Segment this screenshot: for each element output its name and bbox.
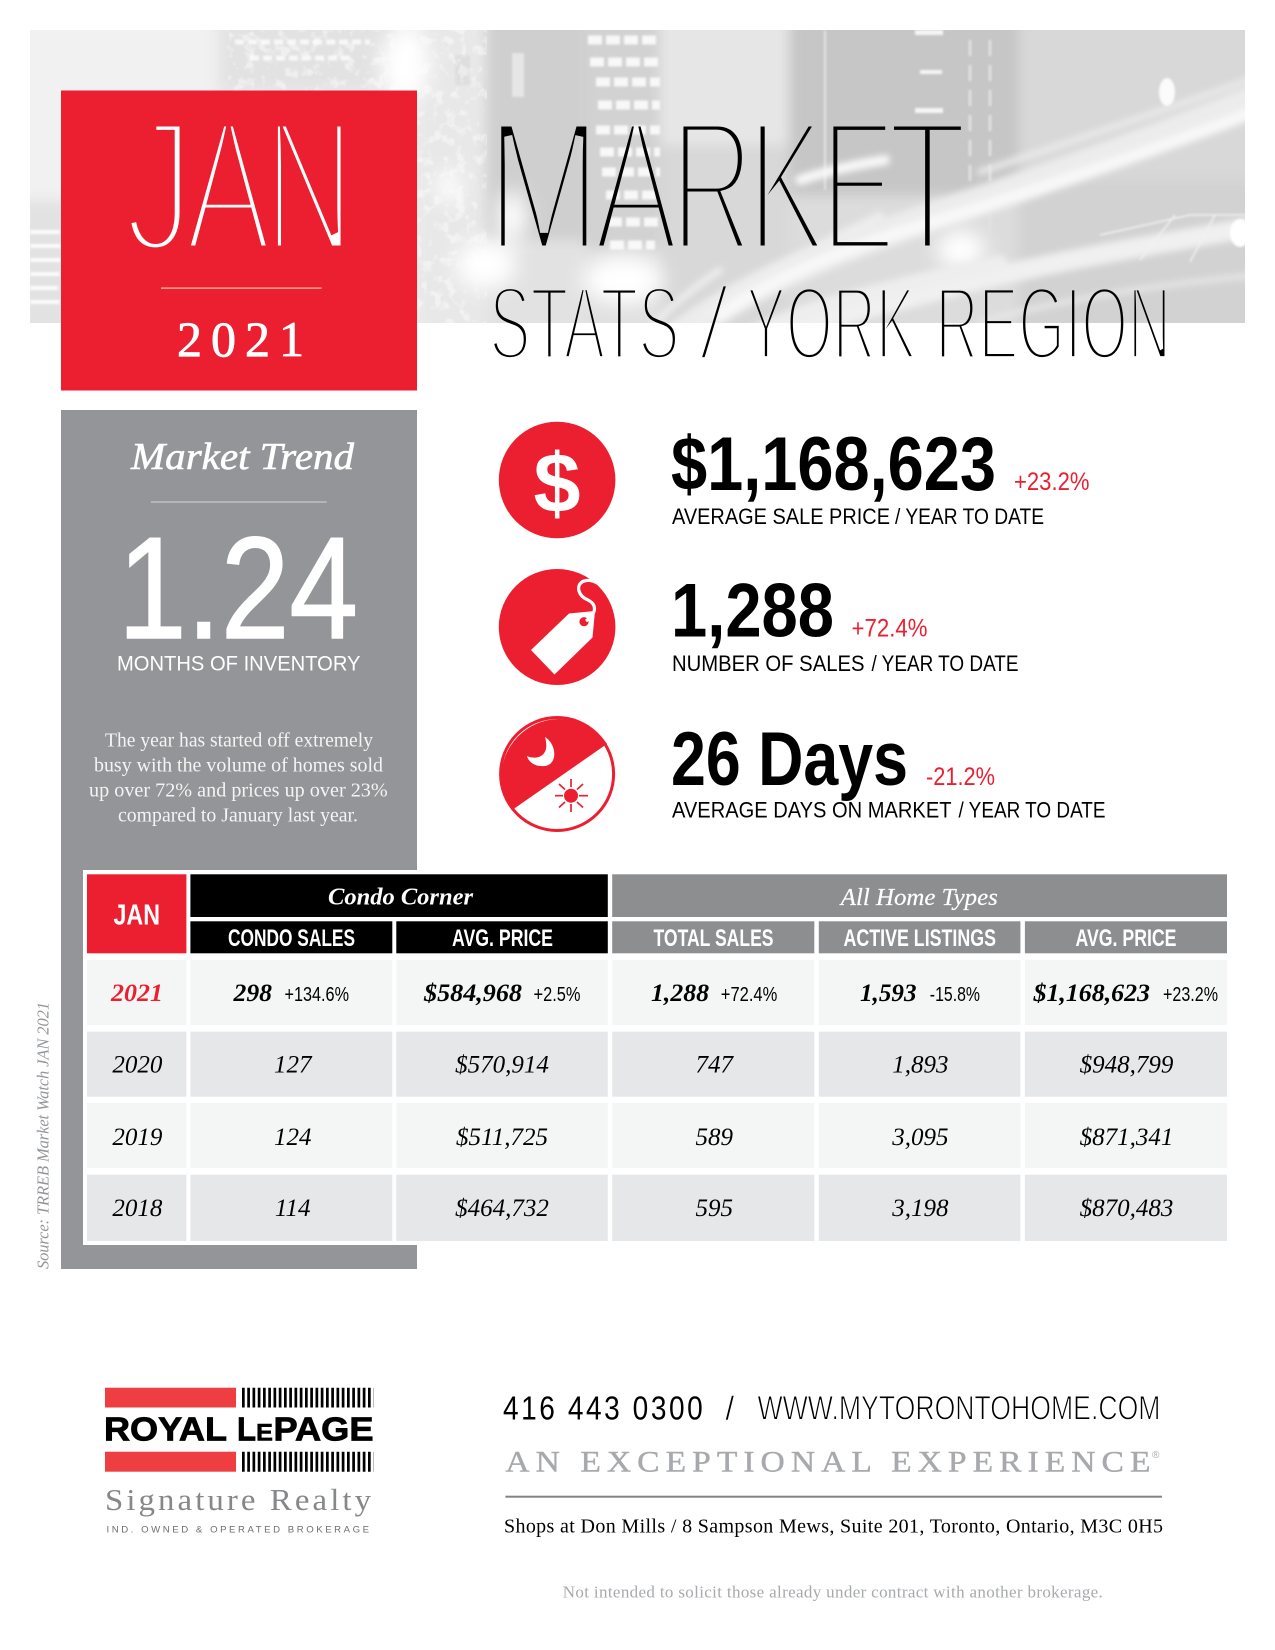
- stat: average sale price: $1,168,623: [671, 422, 996, 507]
- row 2019: $871,341: [1080, 1124, 1173, 1151]
- title: MARKET: E: [821, 81, 896, 292]
- row 2021: +134.6%: [284, 984, 349, 1006]
- paragraph: market summary: busy with the volume of homes sold: [94, 755, 383, 777]
- tagline: AN EXCEPTIONAL EXPERIENCE: [505, 1445, 1151, 1478]
- header group: Condo Corner: Condo Corner: [328, 884, 474, 910]
- contact line: phone and website: 416 443 0300: [503, 1390, 703, 1427]
- stat: average sale price: AVERAGE SALE PRICE: [672, 504, 890, 529]
- row 2020: $570,914: [455, 1052, 549, 1079]
- subtitle: STATS / YORK REGION: [494, 286, 1164, 358]
- header group: All Home Types: [612, 874, 1227, 917]
- title: MARKET: T: [887, 81, 968, 292]
- subtitle: STATS / YORK REGION: /: [698, 266, 730, 382]
- disclaimer: Not intended to solicit those already under contract with another brokerage.: [563, 1583, 1103, 1602]
- row 2020: 2020: [112, 1052, 163, 1079]
- row 2018: 2018: [112, 1195, 163, 1222]
- row 2021: +23.2%: [1163, 984, 1218, 1006]
- stat: number of sales: [671, 569, 1018, 676]
- column headers: AVG. PRICE: [452, 925, 553, 952]
- logo: Royal LePage Signature Realty: PAGE: [274, 1412, 374, 1449]
- logo: Royal LePage Signature Realty: IND. OWNED & OPERATED BROKERAGE: [106, 1525, 369, 1536]
- header group: Condo Corner: [190, 874, 608, 917]
- contact line: phone and website: WWW.MYTORONTOHOME.COM: [758, 1390, 1160, 1428]
- table corner: JAN: JAN: [114, 899, 160, 931]
- stat: average sale price: +23.2%: [1014, 468, 1090, 496]
- row 2021: 298: [232, 980, 273, 1007]
- stat: average days on market: AVERAGE DAYS ON MARKET: [672, 798, 952, 823]
- paragraph: market summary: The year has started off extremely: [105, 730, 373, 752]
- panel: market trend: [61, 410, 417, 1269]
- header group: All Home Types: All Home Types: [839, 885, 998, 911]
- column headers: [190, 921, 1227, 953]
- month heading JAN: N: [264, 81, 354, 292]
- stat: average days on market: / YEAR TO DATE: [958, 798, 1106, 823]
- stat: number of sales: +72.4%: [852, 615, 928, 643]
- row 2021: 1,288: [651, 980, 710, 1007]
- row 2020: 1,893: [892, 1052, 949, 1079]
- contact line: phone and website: /: [726, 1389, 735, 1426]
- column headers: CONDO SALES: [228, 925, 355, 952]
- column headers: TOTAL SALES: [654, 925, 774, 952]
- row 2021: -15.8%: [930, 984, 980, 1006]
- title: MARKET: A: [594, 81, 678, 292]
- stat label: months of inventory: MONTHS OF INVENTORY: [117, 652, 360, 676]
- tree texture: [225, 30, 487, 323]
- logo: Royal LePage Signature Realty: L: [237, 1412, 256, 1449]
- icon: dollar sign: $: [534, 436, 580, 530]
- row 2020: 127: [274, 1052, 313, 1079]
- row 2018: 3,198: [891, 1195, 949, 1222]
- tagline: ®: [1152, 1450, 1160, 1461]
- paragraph: market summary: compared to January last year.: [118, 805, 358, 827]
- background photo: city night street: [30, 30, 1245, 323]
- icon: dollar sign: [499, 422, 615, 538]
- row 2018: 114: [275, 1195, 311, 1222]
- stat: number of sales: 1,288: [671, 569, 834, 654]
- table: market statistics: [83, 870, 1231, 1245]
- row 2021: [87, 960, 1227, 1025]
- row 2018: $870,483: [1080, 1195, 1173, 1222]
- stat: number of sales: NUMBER OF SALES: [672, 651, 864, 676]
- row 2020: $948,799: [1080, 1052, 1174, 1079]
- row 2021: $1,168,623: [1032, 980, 1150, 1007]
- row 2019: $511,725: [456, 1124, 548, 1151]
- title: MARKET: [501, 126, 961, 246]
- heading: Market Trend: Market Trend: [130, 436, 355, 478]
- icon: price tag: [499, 569, 615, 685]
- row 2019: 124: [274, 1124, 311, 1151]
- icon: day and night: [501, 718, 614, 830]
- row 2021: +2.5%: [534, 984, 581, 1006]
- stat: 1.24: 1.24: [118, 507, 358, 669]
- logo: Royal LePage Signature Realty: ROYAL: [104, 1412, 227, 1449]
- address: Shops at Don Mills / 8 Sampson Mews, Suite 201, Toronto, Ontario, M3C 0H5: [504, 1516, 1163, 1538]
- source note: Source: TRREB Market Watch JAN 2021: [34, 1002, 52, 1269]
- title: MARKET: M: [486, 81, 602, 292]
- row 2019: 589: [696, 1124, 734, 1151]
- column headers: ACTIVE LISTINGS: [844, 925, 996, 952]
- panel: red month box: [61, 81, 417, 390]
- row 2020: 747: [696, 1052, 735, 1079]
- paragraph: market summary: [89, 730, 388, 827]
- row 2018: 595: [696, 1195, 733, 1222]
- year 2021: 2021: [177, 311, 304, 367]
- logo: Royal LePage Signature Realty: Signature Realty: [105, 1483, 371, 1517]
- month heading JAN: J: [124, 81, 194, 292]
- stat: average sale price: / YEAR TO DATE: [895, 504, 1044, 529]
- row 2020: [87, 1032, 1227, 1097]
- stat: number of sales: / YEAR TO DATE: [872, 651, 1018, 676]
- row 2021: 2021: [110, 980, 163, 1007]
- title: MARKET: K: [748, 81, 826, 292]
- column headers: AVG. PRICE: [1076, 925, 1176, 952]
- row 2019: [87, 1103, 1227, 1168]
- table corner: JAN: [87, 874, 186, 953]
- logo: Royal LePage Signature Realty: [104, 1388, 374, 1536]
- contact line: phone and website: [503, 1389, 1160, 1428]
- subtitle: STATS / YORK REGION: STATS: [489, 266, 680, 382]
- stat: average days on market: [671, 717, 1106, 823]
- row 2021: +72.4%: [721, 984, 777, 1006]
- paragraph: market summary: up over 72% and prices up over 23%: [89, 780, 388, 802]
- subtitle: STATS / YORK REGION: YORK: [746, 266, 916, 382]
- logo: Royal LePage Signature Realty: E: [256, 1420, 273, 1447]
- row 2021: 1,593: [860, 980, 916, 1007]
- title: MARKET: R: [671, 81, 754, 292]
- row 2019: 2019: [112, 1124, 163, 1151]
- row 2021: $584,968: [423, 980, 523, 1007]
- stat: average days on market: -21.2%: [926, 763, 995, 791]
- month heading JAN: A: [185, 81, 272, 292]
- row 2018: $464,732: [455, 1195, 549, 1222]
- stat: average days on market: 26 Days: [671, 717, 908, 802]
- row 2018: [87, 1175, 1227, 1241]
- row 2019: 3,095: [891, 1124, 949, 1151]
